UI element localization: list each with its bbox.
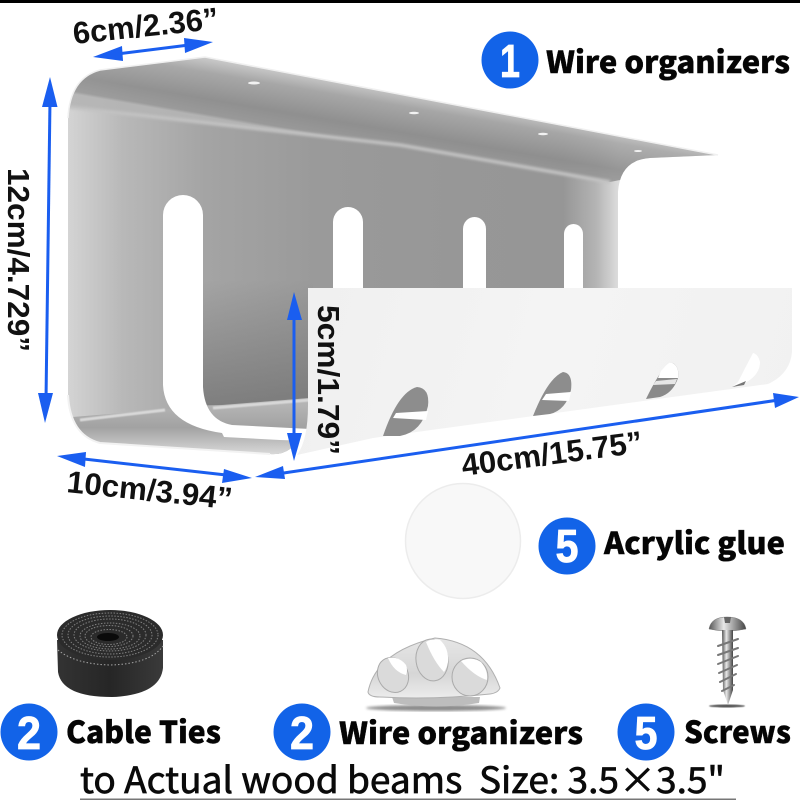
badge: 2 cable ties — [0, 704, 58, 760]
label: 12cm height: 12cm/4.729” — [1, 168, 36, 352]
icon: cable tie roll — [57, 610, 163, 697]
label: screws: Screws — [684, 708, 791, 752]
icon: screw — [709, 617, 746, 708]
top edge highlight — [68, 57, 718, 155]
wall slot 2 — [333, 207, 363, 292]
label: 10cm width: 10cm/3.94” — [65, 464, 234, 516]
label: wire organizers top: Wire organizers — [546, 38, 790, 82]
mounting holes — [248, 82, 642, 152]
acrylic glue disc — [406, 484, 520, 598]
label: cable ties: Cable Ties — [66, 708, 221, 752]
arrow: 10cm width — [57, 452, 252, 483]
label: 40cm length: 40cm/15.75” — [459, 424, 644, 483]
arrow: 40cm length — [255, 393, 799, 479]
label: 5cm depth: 5cm/1.79” — [311, 305, 346, 455]
panel hole 4 — [732, 353, 760, 387]
badge: 2 cable ties: 2 — [17, 707, 41, 759]
arrow: 5cm depth — [287, 292, 302, 461]
label: 6cm width: 6cm/2.36” — [71, 1, 220, 51]
panel hole 3 — [646, 362, 678, 399]
badge: 1 — [482, 32, 538, 88]
label: acrylic glue: Acrylic glue — [603, 519, 785, 563]
badge: 2 wire organizers: 2 — [290, 707, 314, 759]
badge: 5 acrylic: 5 — [556, 520, 578, 572]
badge: 1: 1 — [500, 35, 520, 87]
front panel — [297, 288, 792, 455]
arrow: 12cm height — [38, 77, 58, 423]
wall slot 3 — [463, 217, 486, 292]
wall slot 4 — [564, 224, 583, 292]
badge: 5 screws: 5 — [634, 707, 658, 759]
bracket product image — [60, 50, 792, 460]
bracket back wall and lip — [60, 50, 730, 460]
wall slot 1 with U channel — [163, 195, 310, 441]
panel hole 2 — [533, 372, 571, 416]
label: wire organizers bottom: Wire organizers — [339, 709, 583, 753]
badge: 5 screws — [618, 704, 674, 760]
panel hole 1 — [383, 387, 428, 436]
badge: 2 wire organizers — [274, 704, 330, 760]
arrow: 6cm width — [93, 38, 213, 61]
badge: 5 acrylic — [538, 518, 596, 574]
bottom edge highlight — [68, 395, 270, 454]
top black bar — [0, 0, 800, 3]
icon: cable clip dome — [366, 637, 506, 711]
